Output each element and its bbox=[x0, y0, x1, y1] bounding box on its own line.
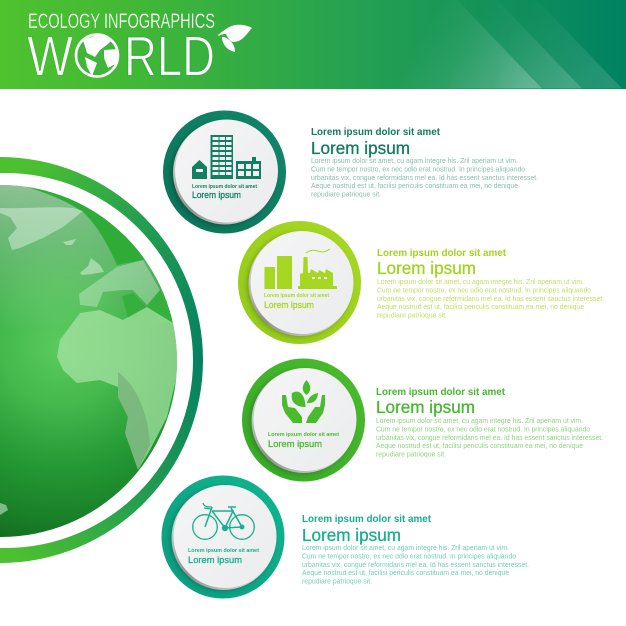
badge label: Lorem ipsum dolor sit amet bbox=[188, 548, 259, 554]
text block 3: Lorem ipsum dolor sit amet bbox=[376, 387, 506, 398]
text block 1: Lorem ipsum dolor sit amet, cu agam integre his. Zril aperiam ut vim. bbox=[311, 156, 518, 165]
left leaf bbox=[292, 392, 306, 407]
text block 3: Aeque nostrud est ut, facilisi periculis constituam ea mei, no denique bbox=[376, 441, 583, 450]
plant bbox=[298, 257, 337, 289]
text block 3: repudiare patrioque sit. bbox=[376, 450, 446, 458]
icon: hands and leaves bbox=[282, 380, 325, 423]
text block 2 bbox=[377, 248, 604, 320]
text block 1: Lorem ipsum bbox=[311, 138, 410, 158]
badge label: Lorem ipsum dolor sit amet bbox=[268, 432, 339, 438]
land: europe bbox=[79, 260, 160, 307]
badge title: Lorem ipsum bbox=[268, 439, 322, 450]
text block 2: Aeque nostrud est ut, facilisi periculis constituam ea mei, no denique bbox=[377, 302, 584, 311]
word WORLD letters RLD: RLD bbox=[124, 24, 215, 88]
text block 4: repudiare patrioque sit. bbox=[302, 576, 372, 586]
low building bbox=[236, 157, 261, 179]
text block 3: Cum ne tempor nostro, ex nec odio erat nostrud. In principes aliquando bbox=[376, 424, 590, 434]
badge 4: bicycle bbox=[162, 476, 284, 598]
icon: leaves bbox=[218, 25, 252, 52]
land: uk bbox=[80, 258, 104, 275]
header band bbox=[0, 0, 626, 89]
left hand bbox=[282, 395, 302, 423]
text block 1 bbox=[311, 127, 538, 198]
text block 1: Aeque nostrud est ut, facilisi periculis constituam ea mei, no denique bbox=[311, 181, 518, 190]
text block 1: Lorem ipsum dolor sit amet bbox=[311, 127, 441, 138]
text block 3: Lorem ipsum dolor sit amet, cu agam integre his. Zril aperiam ut vim. bbox=[376, 416, 583, 425]
land: north bbox=[0, 207, 83, 250]
badge 2: factory bbox=[238, 221, 361, 344]
land: south bbox=[0, 503, 8, 515]
text block 2: Cum ne tempor nostro, ex nec odio erat nostrud. In principes aliquando bbox=[377, 286, 591, 294]
badge title: Lorem ipsum bbox=[192, 190, 241, 201]
text block 2: urbanitas vix, congue reformidans mel ea. Id has essent sanctus interesset. bbox=[377, 294, 604, 303]
badge title: Lorem ipsum bbox=[264, 300, 314, 311]
small title: ECOLOGY INFOGRAPHICS bbox=[28, 10, 215, 33]
text block 3: Lorem ipsum bbox=[376, 397, 475, 417]
land: island bbox=[63, 239, 76, 245]
globe ring bbox=[0, 157, 203, 563]
text block 4: Aeque nostrud est ut, facilisi periculis constituam ea mei, no denique bbox=[302, 568, 509, 577]
text block 4: Lorem ipsum dolor sit amet bbox=[302, 514, 432, 525]
tower bbox=[210, 135, 233, 179]
right hand bbox=[306, 395, 325, 423]
text block 4 bbox=[302, 514, 529, 586]
badge 3: hands and plant bbox=[242, 358, 365, 482]
text block 1: Cum ne tempor nostro, ex nec odio erat nostrud. In principes aliquando bbox=[311, 164, 525, 174]
badge label: Lorem ipsum dolor sit amet bbox=[192, 184, 257, 190]
text block 3 bbox=[376, 387, 603, 458]
header title bbox=[27, 10, 252, 88]
text block 4: Lorem ipsum bbox=[302, 525, 401, 545]
icon: factory bbox=[264, 249, 337, 289]
house bbox=[192, 160, 207, 179]
text block 1: urbanitas vix, congue reformidans mel ea. Id has essent sanctus interesset. bbox=[311, 173, 538, 182]
top-right dark crescent bbox=[26, 186, 144, 265]
text block 2: Lorem ipsum dolor sit amet bbox=[377, 248, 507, 259]
sea: middle east bbox=[122, 290, 175, 322]
text block 4: urbanitas vix, congue reformidans mel ea. Id has essent sanctus interesset. bbox=[302, 560, 529, 569]
icon: buildings bbox=[192, 135, 261, 179]
badge label: Lorem ipsum dolor sit amet bbox=[264, 293, 329, 299]
text block 4: Lorem ipsum dolor sit amet, cu agam integre his. Zril aperiam ut vim. bbox=[302, 543, 509, 552]
smoke bbox=[306, 249, 330, 253]
text block 2: Lorem ipsum bbox=[377, 258, 476, 278]
right leaf bbox=[307, 393, 318, 403]
top leaf bbox=[303, 380, 310, 395]
bars bbox=[264, 256, 292, 289]
africa shade bbox=[118, 372, 150, 470]
badge title: Lorem ipsum bbox=[188, 555, 242, 566]
icon: bicycle bbox=[193, 503, 254, 539]
word WORLD letter W: W bbox=[27, 24, 73, 88]
badge 1: city bbox=[163, 110, 286, 234]
icon: globe letter O bbox=[76, 34, 118, 76]
text block 2: Lorem ipsum dolor sit amet, cu agam integre his. Zril aperiam ut vim. bbox=[377, 277, 584, 286]
text block 2: repudiare patrioque sit. bbox=[377, 310, 447, 320]
text block 1: repudiare patrioque sit. bbox=[311, 190, 381, 198]
text block 3: urbanitas vix, congue reformidans mel ea. Id has essent sanctus interesset. bbox=[376, 433, 603, 442]
land: africa bbox=[57, 307, 180, 470]
text block 4: Cum ne tempor nostro, ex nec odio erat nostrud. In principes aliquando bbox=[302, 552, 516, 560]
globe bbox=[0, 185, 177, 537]
